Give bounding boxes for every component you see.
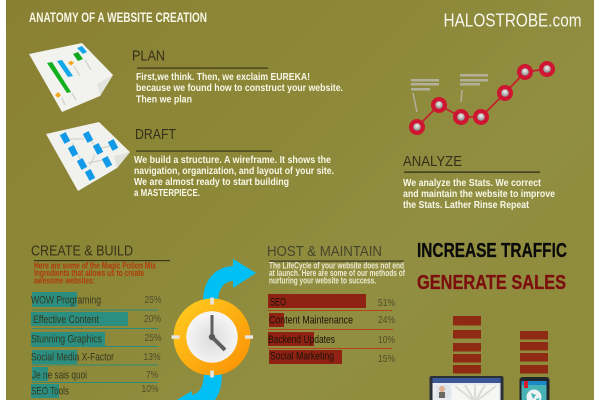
- plan text: Then we plan: [136, 94, 192, 106]
- bar chart: ingredients: Social Media X-Factor: [31, 352, 114, 364]
- plan text: First,we think. Then, we exclaim EUREKA!: [136, 71, 310, 83]
- bar chart: ingredients: WOW Programing: [31, 294, 101, 306]
- stacked bars: left: [453, 316, 481, 374]
- plan text: because we found how to construct your website.: [136, 82, 343, 94]
- stacked bars: right: [520, 331, 548, 374]
- panel: analyze: [403, 153, 555, 211]
- analyze text: [403, 177, 555, 211]
- bar chart: maintenance: 10%: [378, 334, 395, 346]
- bar chart: ingredients: 25%: [144, 294, 162, 306]
- icon: clock: [172, 298, 253, 378]
- bar chart: maintenance: Social Marketing: [270, 350, 334, 362]
- panel: draft: [134, 126, 334, 199]
- bar chart: ingredients: 7%: [146, 369, 158, 381]
- bar chart: ingredients: 10%: [142, 383, 158, 395]
- bar chart: ingredients: [31, 292, 162, 398]
- analyze heading: ANALYZE: [403, 153, 462, 170]
- bar chart: ingredients: Stunning Graphics: [31, 334, 102, 346]
- host and maintain intro: [269, 260, 406, 286]
- analyze text: and maintain the website to improve: [403, 188, 555, 200]
- arrow: top blue: [203, 259, 256, 302]
- create and build intro: Ingredients that allows us to create: [34, 268, 144, 279]
- plan heading: PLAN: [132, 48, 165, 64]
- draft text: We are almost ready to start building: [134, 176, 289, 188]
- bar chart: ingredients: 20%: [144, 313, 161, 325]
- host and maintain intro: The LifeCycle of your website does not end: [269, 260, 404, 272]
- draft text: [134, 154, 334, 199]
- bar chart: maintenance: 15%: [378, 353, 395, 365]
- plan text: [136, 71, 343, 106]
- create and build intro: Here are some of the Magic Potion Mix: [34, 260, 156, 272]
- bar chart: maintenance: Content Maintenance: [269, 314, 353, 326]
- bar chart: ingredients: 13%: [144, 351, 160, 363]
- bar chart: maintenance: [268, 294, 395, 365]
- bar chart: ingredients: Je ne sais quoi: [32, 370, 87, 382]
- icon: phone: [520, 377, 550, 400]
- heading: generate sales: GENERATE SALES: [417, 272, 566, 294]
- line chart: analyze: [409, 61, 555, 135]
- draft heading: DRAFT: [135, 126, 176, 143]
- analyze text: We analyze the Stats. We correct: [403, 177, 541, 189]
- host and maintain heading: HOST & MAINTAIN: [267, 243, 382, 260]
- create and build intro: [34, 260, 156, 286]
- draft text: We build a structure. A wireframe. It shows the: [134, 154, 331, 166]
- draft text: a MASTERPIECE.: [134, 187, 200, 199]
- bar chart: ingredients: SEO Tools: [31, 386, 69, 398]
- panel: host and maintain: [267, 243, 406, 365]
- bar chart: ingredients: 25%: [144, 332, 162, 344]
- bar chart: ingredients: Effective Content: [33, 314, 99, 326]
- bar chart: maintenance: Backend Updates: [268, 334, 335, 346]
- bar chart: maintenance: SEO: [270, 296, 286, 308]
- create and build heading: CREATE & BUILD: [31, 242, 133, 260]
- analyze text: the Stats. Lather Rinse Repeat: [403, 199, 529, 211]
- panel: create and build: [31, 242, 170, 398]
- arrow: bottom blue: [175, 372, 222, 400]
- icon: plan document: [29, 43, 113, 112]
- host and maintain intro: nurturing your website to success.: [269, 276, 376, 286]
- panel: plan: [132, 48, 343, 106]
- icon: draft wireframe document: [46, 122, 130, 191]
- icon: laptop: [430, 376, 504, 400]
- bar chart: maintenance: 51%: [378, 297, 395, 309]
- title: ANATOMY OF A WEBSITE CREATION: [29, 9, 207, 25]
- create and build intro: awesome websites:: [34, 276, 95, 286]
- draft text: navigation, organization, and layout of your site.: [134, 165, 334, 177]
- bar chart: maintenance: 24%: [378, 314, 395, 326]
- host and maintain intro: at launch. Here are some of our methods of: [269, 268, 406, 279]
